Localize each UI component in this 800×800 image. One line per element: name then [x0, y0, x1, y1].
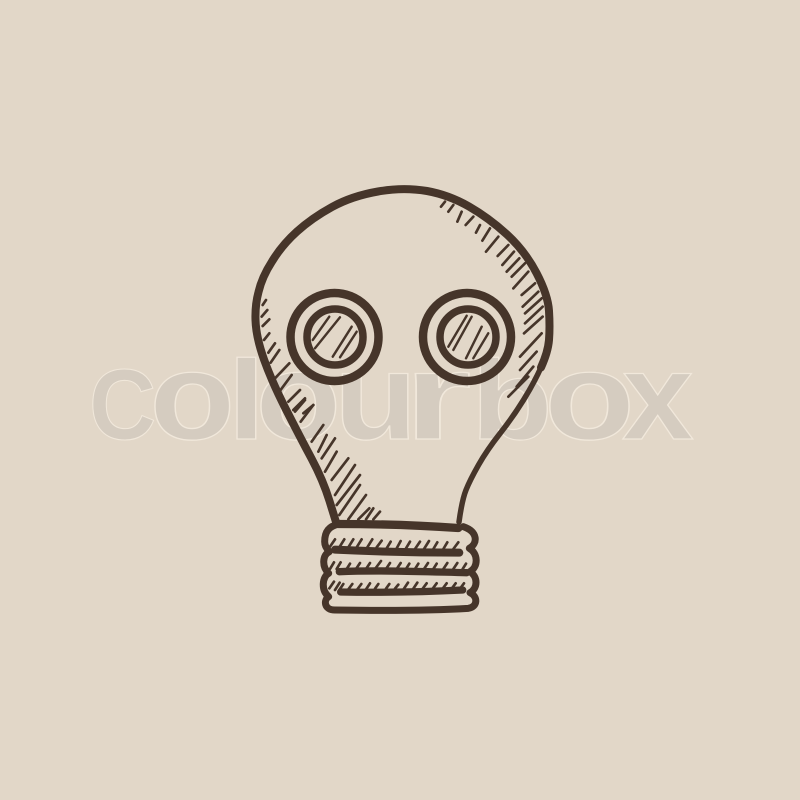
watermark: Colourbox: o	[544, 328, 635, 466]
right eye	[423, 293, 511, 381]
collar	[323, 524, 476, 610]
watermark: Colourbox: o	[256, 327, 341, 466]
watermark: Colourbox: l	[228, 337, 265, 463]
hatching: right side of mask	[441, 202, 543, 397]
left eye	[290, 293, 378, 381]
collar bars	[335, 550, 459, 553]
hatching: left side of mask	[262, 300, 313, 413]
watermark: Colourbox: C	[89, 348, 156, 461]
watermark: Colourbox: r	[404, 326, 472, 465]
collar outline	[323, 524, 476, 610]
collar top band	[338, 524, 458, 528]
hatching: lower left of mask	[295, 400, 380, 519]
watermark: Colourbox: u	[334, 327, 417, 466]
watermark: Colourbox: o	[150, 327, 235, 466]
collar ticks	[329, 539, 466, 590]
watermark: Colourbox	[89, 326, 694, 466]
watermark: Colourbox: x	[622, 326, 694, 465]
mask outline	[255, 189, 550, 522]
watermark: Colourbox: b	[471, 338, 553, 464]
